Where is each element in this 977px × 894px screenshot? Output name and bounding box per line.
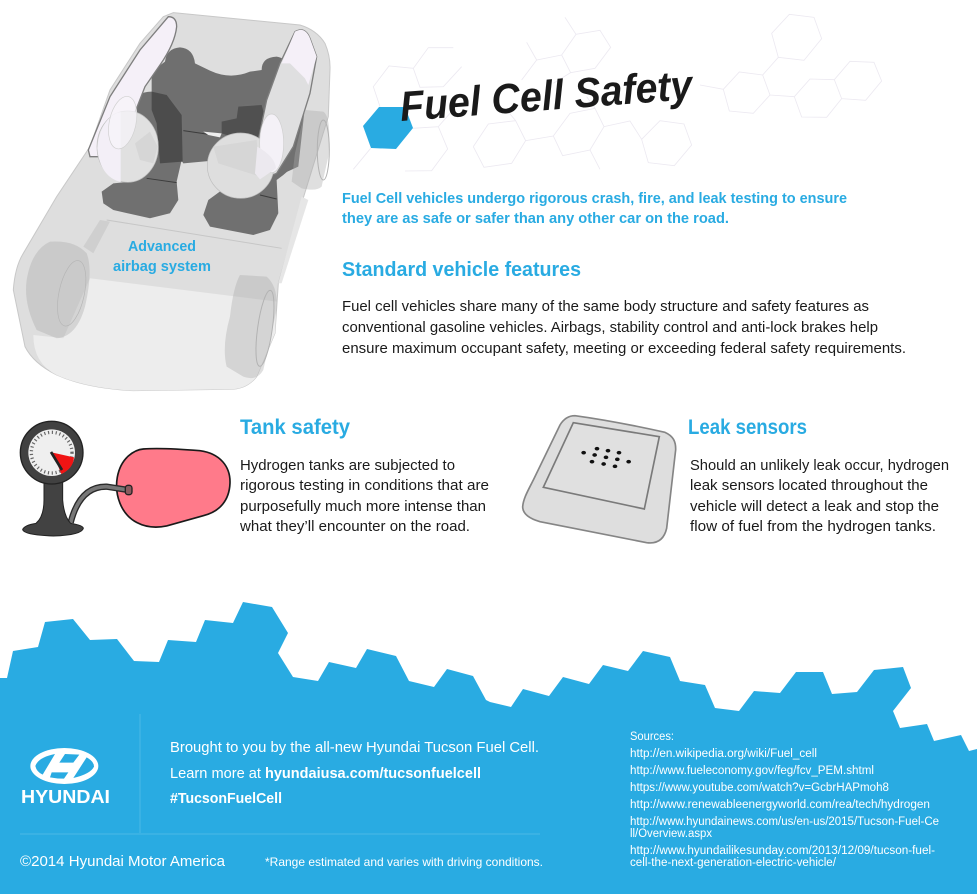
intro text bbox=[342, 190, 847, 227]
right front airbag bbox=[207, 133, 274, 198]
text: tank safety: what they’ll encounter on the road. bbox=[239, 518, 470, 535]
text: tank safety: rigorous testing in conditions that are bbox=[240, 477, 489, 494]
text: leak sensors: Should an unlikely leak occur, hydrogen bbox=[690, 457, 949, 474]
text: tank safety: purposefully much more intense than bbox=[240, 498, 486, 515]
text: standard vehicle features: Fuel cell vehicles share many of the same body structure and safety features as bbox=[342, 298, 869, 315]
icon: blue hexagon bbox=[363, 107, 413, 149]
text: leak sensors bbox=[690, 457, 949, 535]
sources list: http://en.wikipedia.org/wiki/Fuel_cell bbox=[630, 748, 817, 760]
left curtain airbag bbox=[88, 17, 177, 157]
footer call to action: Learn more at bbox=[170, 766, 261, 782]
title: Fuel Cell Safety bbox=[398, 61, 696, 130]
heading: standard vehicle features: Standard vehicle features bbox=[342, 259, 581, 281]
text: leak sensors: vehicle will detect a leak and stop the bbox=[690, 498, 939, 515]
footer call to action: hyundaiusa.com/tucsonfuelcell bbox=[265, 766, 481, 782]
logo: Hyundai bbox=[21, 748, 110, 807]
illustration: car with airbags bbox=[13, 13, 330, 391]
left front airbag bbox=[97, 111, 158, 182]
gauge stand bbox=[23, 480, 83, 536]
footer call to action: Brought to you by the all-new Hyundai Tucson Fuel Cell. bbox=[170, 740, 539, 756]
rear seat bbox=[152, 47, 305, 175]
hose bbox=[71, 487, 128, 523]
text: leak sensors: leak sensors located throughout the bbox=[690, 477, 928, 494]
copyright: ©2014 Hyundai Motor America bbox=[20, 854, 226, 870]
range footnote: *Range estimated and varies with driving conditions. bbox=[265, 855, 543, 869]
airbag label: Advanced bbox=[128, 238, 196, 255]
intro text: they are as safe or safer than any other car on the road. bbox=[342, 210, 729, 227]
sources list: http://www.hyundailikesunday.com/2013/12/09/tucson-fuel- bbox=[630, 845, 935, 857]
footer background bbox=[0, 602, 977, 894]
icon: leak sensor bbox=[523, 416, 676, 543]
icon: pressure gauge and tank bbox=[20, 421, 230, 536]
sources list: Sources: bbox=[630, 729, 674, 743]
tank bbox=[117, 449, 230, 527]
sources list: http://www.fueleconomy.gov/feg/fcv_PEM.shtml bbox=[630, 765, 874, 777]
right front wheel bbox=[225, 275, 277, 378]
left front wheel bbox=[26, 241, 90, 338]
text: standard vehicle features: conventional gasoline vehicles. Airbags, stability control and anti-lock brakes help bbox=[342, 319, 878, 336]
sources list: http://www.hyundainews.com/us/en-us/2015/Tucson-Fuel-Ce bbox=[630, 816, 939, 828]
sources list bbox=[630, 729, 939, 869]
airbag label bbox=[113, 238, 211, 275]
left front seat bbox=[102, 92, 183, 218]
logo: Hyundai: HYUNDAI bbox=[21, 787, 110, 807]
footer call to action bbox=[170, 740, 539, 807]
text: leak sensors: flow of fuel from the hydrogen tanks. bbox=[690, 518, 936, 535]
airbag label: airbag system bbox=[113, 258, 211, 275]
sources list: ll/Overview.aspx bbox=[630, 828, 712, 840]
text: tank safety bbox=[239, 457, 489, 535]
text: standard vehicle features bbox=[342, 298, 906, 357]
sources list: http://www.renewableenergyworld.com/rea/tech/hydrogen bbox=[630, 799, 930, 811]
text: tank safety: Hydrogen tanks are subjected to bbox=[240, 457, 455, 474]
footer call to action: #TucsonFuelCell bbox=[170, 791, 282, 807]
right curtain airbag bbox=[255, 30, 317, 180]
intro text: Fuel Cell vehicles undergo rigorous crash, fire, and leak testing to ensure bbox=[342, 190, 847, 207]
right rear wheel bbox=[292, 110, 329, 190]
gauge face bbox=[20, 421, 83, 484]
sources list: https://www.youtube.com/watch?v=GcbrHAPmoh8 bbox=[630, 782, 889, 794]
text: standard vehicle features: ensure maximum occupant safety, meeting or exceeding federal safety requirements. bbox=[342, 340, 906, 357]
heading: leak sensors: Leak sensors bbox=[688, 416, 807, 439]
right front seat bbox=[203, 104, 297, 235]
car body bbox=[13, 13, 330, 391]
sources list: cell-the-next-generation-electric-vehicle/ bbox=[630, 857, 837, 869]
hexagon background pattern bbox=[353, 14, 882, 171]
heading: tank safety: Tank safety bbox=[240, 416, 350, 439]
